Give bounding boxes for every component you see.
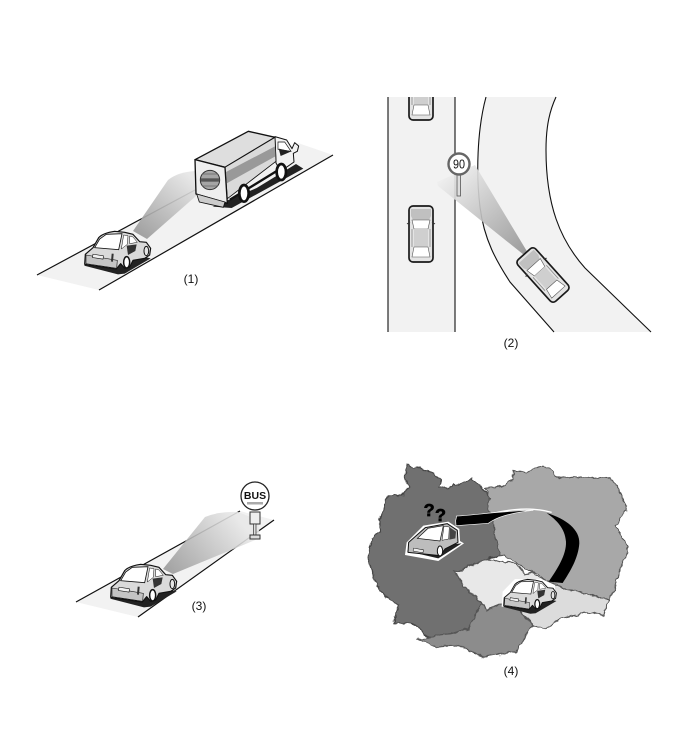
map: light country (455, 558, 557, 610)
road edge lines (37, 155, 333, 290)
map: southern country (417, 603, 533, 657)
straight road (388, 97, 455, 332)
question marks: ? (424, 500, 435, 520)
caption (3): (3) (192, 599, 206, 613)
speed limit sign: 90 (453, 158, 465, 172)
road edge lines (76, 511, 274, 617)
panel 2: speed limit sign recognition (387, 96, 652, 332)
truck (195, 131, 303, 208)
road (76, 511, 274, 617)
curved road (478, 97, 651, 332)
caption (1): (1) (184, 272, 198, 286)
question marks (424, 500, 446, 525)
bus stop sign (241, 482, 269, 539)
arrow (456, 509, 579, 583)
camera view cone (163, 512, 260, 574)
map: dark country (368, 464, 499, 638)
panel 1: truck sign recognition (37, 131, 333, 290)
hatchback car (405, 522, 464, 561)
speed limit sign (448, 154, 470, 196)
panel 4: border crossing map (368, 464, 628, 657)
panel 3: bus stop sign recognition (76, 482, 274, 617)
camera view cone (437, 165, 534, 263)
road edge lines (388, 97, 651, 332)
map of countries (368, 464, 628, 657)
bus stop sign: BUS (244, 490, 266, 502)
car (84, 231, 151, 274)
caption (2): (2) (504, 336, 518, 350)
camera view cone (133, 171, 196, 239)
sedan car (502, 579, 556, 614)
question marks: ? (435, 505, 446, 525)
upper car (408, 97, 434, 121)
road (37, 143, 333, 290)
car (110, 564, 177, 607)
map: large light-grey country (485, 465, 628, 600)
lower car (407, 206, 435, 262)
caption (4): (4) (504, 664, 518, 678)
turning car (514, 245, 572, 305)
map: pale southeastern country (517, 585, 610, 628)
truck rear sign (200, 170, 220, 190)
